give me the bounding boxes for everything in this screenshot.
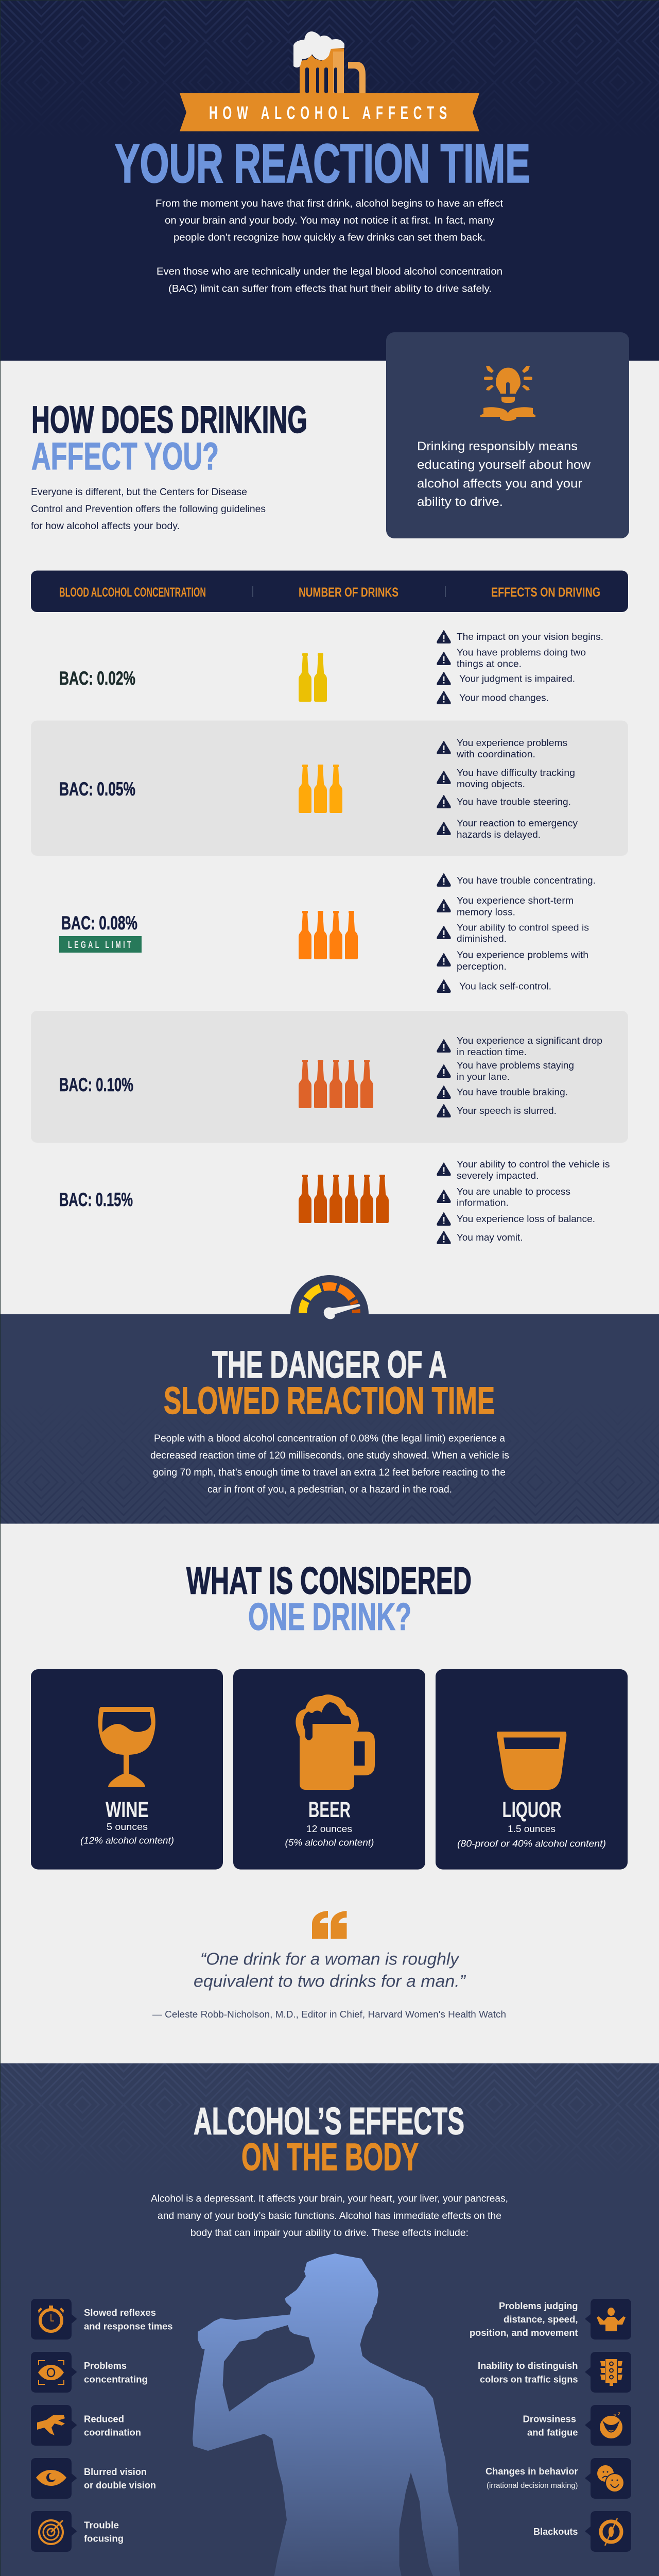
- quote text: “One drink for a woman is roughly: [200, 1950, 460, 1969]
- label: BAC 0.08%: BAC: 0.08%: [61, 912, 137, 934]
- text: beer: BEER: [308, 1798, 351, 1822]
- quote text: equivalent to two drinks for a man.”: [194, 1971, 466, 1990]
- text block: reaction time facts: going 70 mph, that’s enough time to travel an extra 12 feet before reacting to the: [153, 1467, 506, 1478]
- table header: NUMBER OF DRINKS: [299, 585, 398, 600]
- effects list: You have trouble concentrating.: [457, 875, 596, 886]
- heading: alcohol's effects on the body: ALCOHOL’S EFFECTS: [194, 2100, 464, 2142]
- text block: reaction time facts: People with a blood alcohol concentration of 0.08% (the legal limit) experience a: [154, 1433, 505, 1444]
- effects list: You lack self-control.: [459, 981, 551, 992]
- heading: how does drinking affect you: [31, 398, 307, 478]
- icon: quotation mark: [312, 1911, 347, 1939]
- effects list: Your judgment is impaired.: [459, 674, 575, 684]
- effect: trouble focusing: Trouble: [84, 2520, 119, 2531]
- row: BAC 0.15%: [59, 1159, 610, 1244]
- bottles: three: [299, 765, 342, 813]
- effect: inability to distinguish colors: colors on traffic signs: [480, 2375, 578, 2385]
- icon: beer mug: [294, 32, 366, 93]
- text block: effects intro: Alcohol is a depressant. It affects your brain, your heart, your liver, your pancreas,: [151, 2194, 508, 2205]
- label: BAC 0.15%: BAC: 0.15%: [59, 1189, 133, 1210]
- text block: reaction time facts: car in front of you, a pedestrian, or a hazard in the road.: [207, 1484, 452, 1495]
- icon: sleeping face: z: [618, 2411, 620, 2417]
- effects list: [437, 630, 603, 704]
- icon: target: [39, 2520, 63, 2544]
- label: BAC 0.10%: BAC: 0.10%: [59, 1074, 133, 1095]
- row: BAC 0.08%: [59, 873, 596, 993]
- icon: sleeping face: [600, 2411, 622, 2438]
- effects list: Your ability to control speed is: [457, 922, 589, 933]
- panel: wine: [31, 1669, 223, 1870]
- effects list: You may vomit.: [457, 1232, 523, 1243]
- bottles: six: [299, 1175, 389, 1223]
- icon: two faces: [597, 2465, 625, 2493]
- effects list: in reaction time.: [457, 1047, 527, 1057]
- effects list: You have trouble braking.: [457, 1087, 568, 1097]
- table header: EFFECTS ON DRIVING: [491, 585, 600, 600]
- panel: beer: [233, 1669, 425, 1870]
- text: liquor: LIQUOR: [502, 1798, 561, 1822]
- panel: beer: (5% alcohol content): [285, 1837, 374, 1848]
- text: drinking responsibly: ability to drive.: [417, 495, 503, 509]
- effects list: severely impacted.: [457, 1171, 539, 1181]
- heading: what is considered one drink: ONE DRINK?: [248, 1595, 411, 1638]
- effects list: things at once.: [457, 659, 522, 669]
- icon: traffic light: [600, 2359, 622, 2386]
- panel: drinking responsibly card: [386, 332, 629, 538]
- icon: lightbulb over book: [480, 366, 535, 421]
- effect: slowed reflexes: Slowed reflexes: [84, 2308, 156, 2318]
- text: drinking responsibly: alcohol affects you and your: [417, 477, 582, 490]
- icon: pinching hand: [37, 2415, 65, 2435]
- effect: problems judging distance: distance, speed,: [504, 2314, 578, 2325]
- heading: how does drinking affect you: HOW DOES DRINKING: [31, 398, 307, 441]
- panel: wine: 5 ounces: [107, 1822, 148, 1832]
- panel: liquor: [436, 1669, 628, 1870]
- panel: alcohol's effects on the body: [0, 2063, 659, 2576]
- effect: problems judging distance: [470, 2299, 631, 2340]
- effects list: [437, 1036, 602, 1117]
- panel: beer: 12 ounces: [306, 1824, 352, 1834]
- icon: blackout symbol: [601, 2518, 621, 2546]
- effect: reduced coordination: Reduced: [84, 2414, 124, 2424]
- effect: problems concentrating: [31, 2352, 148, 2393]
- badge: legal limit: LEGAL LIMIT: [68, 940, 133, 950]
- effect: slowed reflexes: [31, 2299, 173, 2340]
- text: drinking responsibly: [417, 439, 591, 509]
- effects list: perception.: [457, 961, 507, 972]
- quote text: [194, 1950, 466, 1990]
- effect: changes in behavior: Changes in behavior: [485, 2466, 578, 2477]
- icon: sleeping face: z: [613, 2412, 616, 2419]
- effects list: memory loss.: [457, 907, 515, 917]
- panel: hero: [0, 0, 659, 361]
- effects list: You have difficulty tracking: [457, 768, 575, 778]
- banner: how alcohol affects: [180, 93, 479, 131]
- effects list: Your speech is slurred.: [457, 1106, 557, 1116]
- text block: guidelines intro: for how alcohol affects your body.: [31, 521, 180, 532]
- effects list: Your ability to control the vehicle is: [457, 1159, 610, 1170]
- panel: wine: (12% alcohol content): [80, 1836, 174, 1846]
- bottles: five: [299, 1060, 373, 1108]
- bottles: four: [299, 911, 358, 959]
- heading: the danger of a slowed reaction time: THE DANGER OF A: [212, 1343, 447, 1386]
- bottles: two: [299, 653, 327, 702]
- text: drinking responsibly: Drinking responsibly means: [417, 439, 578, 453]
- row: BAC 0.10%: [31, 1011, 628, 1143]
- text block: effects intro: [151, 2194, 508, 2239]
- effects list: hazards is delayed.: [457, 829, 541, 840]
- effect: changes in behavior: (irrational decision making): [487, 2481, 578, 2490]
- heading: how does drinking affect you: AFFECT YOU?: [31, 435, 219, 478]
- icon: shrugging person: [597, 2308, 626, 2331]
- text block: hero intro: (BAC) limit can suffer from effects that hurt their ability to drive safely.: [168, 283, 492, 295]
- effect: reduced coordination: coordination: [84, 2428, 141, 2438]
- effect: problems judging distance: Problems judging: [499, 2301, 578, 2311]
- effects list: You have problems staying: [457, 1060, 574, 1071]
- text block: effects intro: and many of your body’s basic functions. Alcohol has immediate effects on the: [158, 2211, 501, 2222]
- effects list: You experience problems with: [457, 950, 588, 960]
- effects list: with coordination.: [456, 749, 535, 759]
- effect: blackouts: [533, 2511, 631, 2552]
- heading: alcohol's effects on the body: ON THE BODY: [241, 2136, 419, 2178]
- text block: reaction time facts: [150, 1433, 509, 1495]
- icon: liquor glass: [497, 1732, 566, 1790]
- effect: inability to distinguish colors: Inability to distinguish: [478, 2361, 578, 2371]
- text block: hero intro: Even those who are technically under the legal blood alcohol concentration: [157, 266, 502, 277]
- panel: liquor: (80-proof or 40% alcohol content): [457, 1839, 606, 1849]
- label: BAC 0.05%: BAC: 0.05%: [59, 778, 135, 800]
- effect: blurred vision: Blurred vision: [84, 2467, 147, 2477]
- effect: blurred vision: [31, 2458, 156, 2499]
- text block: effects intro: body that can impair your ability to drive. These effects include:: [190, 2228, 469, 2239]
- effects list: You have problems doing two: [457, 647, 586, 657]
- text block: guidelines intro: Control and Prevention offers the following guidelines: [31, 504, 266, 515]
- icon: eye: [36, 2470, 66, 2486]
- badge: legal limit: [59, 936, 142, 953]
- banner: how alcohol affects: HOW ALCOHOL AFFECTS: [209, 103, 452, 123]
- effects list: [437, 738, 578, 840]
- text: drinking responsibly: educating yourself about how: [417, 458, 591, 472]
- panel: danger of a slowed reaction time: [0, 1275, 659, 1524]
- icon: beer mug: [296, 1694, 375, 1790]
- effect: drowsiness and fatigue: Drowsiness: [523, 2414, 576, 2424]
- effects list: [437, 1159, 610, 1244]
- effect: trouble focusing: focusing: [84, 2534, 124, 2544]
- icon: speedometer gauge: [290, 1275, 369, 1319]
- effect: slowed reflexes: and response times: [84, 2321, 173, 2331]
- panel: liquor: 1.5 ounces: [508, 1824, 556, 1834]
- text block: hero intro: From the moment you have that first drink, alcohol begins to have an effect: [155, 198, 504, 209]
- effects list: in your lane.: [457, 1072, 510, 1082]
- effects list: moving objects.: [457, 779, 525, 789]
- heading: alcohol's effects on the body: [194, 2100, 464, 2178]
- effects list: Your mood changes.: [459, 693, 549, 703]
- row: BAC 0.05%: [31, 721, 628, 856]
- effects list: diminished.: [457, 934, 507, 944]
- heading: the danger of a slowed reaction time: [164, 1343, 495, 1422]
- effect: trouble focusing: [31, 2511, 124, 2552]
- effects list: You experience short-term: [457, 895, 574, 906]
- table header: [31, 571, 628, 612]
- heading: what is considered one drink: WHAT IS CONSIDERED: [186, 1559, 472, 1602]
- effects list: You have trouble steering.: [457, 796, 571, 807]
- heading: what is considered one drink: [186, 1559, 472, 1638]
- effect: blackouts: Blackouts: [533, 2527, 578, 2537]
- icon: wine glass: [98, 1707, 155, 1787]
- effects list: You experience a significant drop: [457, 1036, 602, 1046]
- effect: inability to distinguish colors: [478, 2352, 631, 2393]
- effect: changes in behavior: [485, 2458, 631, 2499]
- row: BAC 0.02%: [59, 630, 603, 704]
- effects list: The impact on your vision begins.: [457, 632, 603, 642]
- effect: problems concentrating: Problems: [84, 2361, 127, 2371]
- effect: problems judging distance: position, and movement: [470, 2328, 578, 2338]
- text block: guidelines intro: Everyone is different, but the Centers for Disease: [31, 487, 247, 498]
- heading: the danger of a slowed reaction time: SLOWED REACTION TIME: [164, 1379, 495, 1422]
- quote attribution: — Celeste Robb-Nicholson, M.D., Editor in Chief, Harvard Women's Health Watch: [152, 2009, 506, 2020]
- label: BAC 0.02%: BAC: 0.02%: [59, 668, 135, 689]
- text block: reaction time facts: decreased reaction time of 120 milliseconds, one study showed. When a vehicle is: [150, 1450, 509, 1461]
- effects list: You experience problems: [457, 738, 567, 748]
- effect: drowsiness and fatigue: and fatigue: [527, 2428, 578, 2438]
- effect: blurred vision: or double vision: [84, 2480, 156, 2490]
- effect: problems concentrating: concentrating: [84, 2375, 148, 2385]
- table header: BLOOD ALCOHOL CONCENTRATION: [59, 585, 206, 600]
- text block: hero intro: people don’t recognize how quickly a few drinks can set them back.: [174, 232, 485, 243]
- effects list: information.: [457, 1198, 509, 1208]
- illustration: silhouette drinking from bottle: [193, 2253, 466, 2576]
- text block: hero intro: on your brain and your body. You may not notice it at first. In fact, many: [165, 215, 495, 226]
- text: wine: WINE: [106, 1798, 149, 1822]
- effect: reduced coordination: [31, 2405, 141, 2446]
- effects list: [437, 873, 596, 993]
- text block: guidelines intro: [31, 487, 266, 532]
- text block: hero intro: [155, 198, 504, 295]
- effects list: You experience loss of balance.: [457, 1214, 595, 1224]
- effects list: Your reaction to emergency: [457, 818, 578, 828]
- icon: alarm clock: [38, 2306, 64, 2331]
- effects list: You are unable to process: [457, 1187, 570, 1197]
- effect: drowsiness and fatigue: [523, 2405, 631, 2446]
- icon: eye in focus frame: [38, 2361, 64, 2384]
